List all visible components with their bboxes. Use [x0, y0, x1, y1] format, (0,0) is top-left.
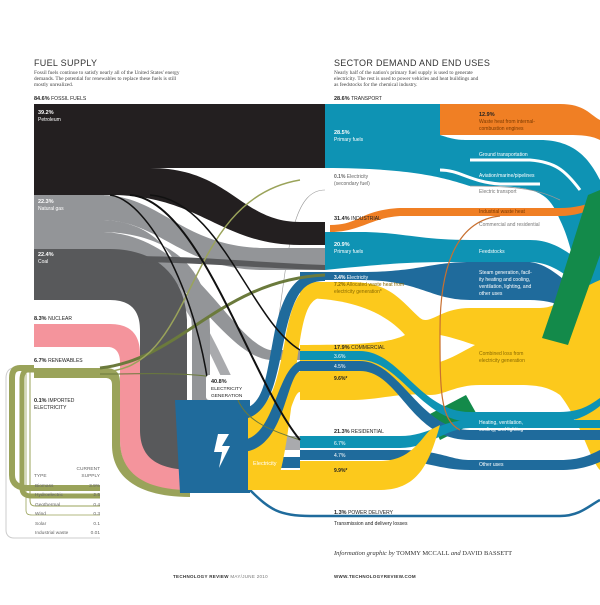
- table: renewables: 2.5: [93, 492, 100, 498]
- labels: right: Aviation/marine/pipelines: [479, 173, 535, 179]
- labels: right: 4.7%: [334, 453, 346, 459]
- industrial steam dark blue: [300, 262, 600, 325]
- icon: lightning: [214, 434, 230, 468]
- label: electricity generation: GENERATION: [211, 393, 243, 399]
- heading: sector demand: [334, 58, 490, 88]
- nuclear: [34, 324, 195, 490]
- labels: right: Transmission and delivery losses: [334, 521, 408, 527]
- labels: right: 3.4% Electricity: [334, 275, 369, 281]
- labels: left: Natural gas: [38, 206, 64, 212]
- labels: right: electricity generation*: [334, 289, 382, 295]
- table: renewables: 0.4: [93, 502, 100, 508]
- orange waste heat transport: [440, 104, 600, 140]
- heading: fuel supply: [34, 58, 180, 88]
- labels: right: Primary fuels: [334, 249, 364, 255]
- table: renewables: [34, 466, 101, 536]
- label: electricity generation: [206, 375, 246, 400]
- labels: left: Petroleum: [38, 117, 61, 123]
- labels: right: Feedstocks: [479, 249, 505, 255]
- transport primary fuels teal: [325, 104, 600, 330]
- labels: left: 39.2%: [38, 110, 54, 116]
- thin lines: [260, 190, 325, 420]
- labels: right: Waste heat from internal-: [479, 119, 535, 125]
- table: renewables: CURRENT: [77, 466, 100, 472]
- labels: right: Steam generation, facil-: [479, 270, 532, 276]
- coal: [34, 249, 210, 480]
- table: renewables: 0.01: [91, 530, 100, 536]
- yellow allocated losses: [248, 283, 325, 490]
- labels: right: 20.9%: [334, 242, 350, 248]
- labels: right: Primary fuels: [334, 137, 364, 143]
- petroleum: [34, 104, 325, 195]
- labels: left: 22.4%: [38, 252, 54, 258]
- table: renewables: 0.3: [93, 511, 100, 517]
- labels: right: ventilation, lighting, and: [479, 284, 531, 290]
- footer: WWW.TECHNOLOGYREVIEW.COM: [334, 574, 416, 579]
- heading: sector demand: SECTOR DEMAND AND END USES: [334, 58, 490, 68]
- labels: right: 6.7%: [334, 441, 346, 447]
- natural gas: [34, 195, 104, 249]
- labels: left: 84.6% FOSSIL FUELS: [34, 96, 87, 102]
- green diagonal: [542, 190, 600, 345]
- labels: right: 9.6%*: [334, 376, 347, 382]
- labels: right: Heating, ventilation,: [479, 420, 523, 426]
- blue bands from generation: [235, 272, 325, 420]
- yellow combined losses: [300, 280, 600, 470]
- table: renewables: SUPPLY: [81, 473, 101, 479]
- labels: right: Other uses: [479, 462, 504, 468]
- footer: [173, 574, 416, 579]
- heading: fuel supply: FUEL SUPPLY: [34, 58, 97, 68]
- labels: right: 31.4% INDUSTRIAL: [334, 216, 381, 222]
- labels: right: Commercial and residential: [479, 222, 540, 228]
- heading: sector demand: as feedstocks for the chemical industry.: [334, 81, 418, 88]
- table: renewables: Industrial waste: [35, 530, 69, 536]
- labels: left: 22.3%: [38, 199, 54, 205]
- labels: right: 4.5%: [334, 364, 346, 370]
- electricity generation blue: [175, 400, 250, 493]
- heading: fuel supply: demands. The potential for renewables to replace these fuels is still: [34, 75, 177, 82]
- industrial waste heat orange: [330, 200, 600, 232]
- labels: left: 0.1% IMPORTED: [34, 398, 75, 404]
- green renewables to industry: [100, 275, 325, 368]
- table: renewables: Wind: [35, 511, 46, 517]
- labels: right: Industrial waste heat: [479, 209, 525, 215]
- labels: right: 1.3% POWER DELIVERY: [334, 510, 394, 516]
- flows: right side end uses: [250, 104, 600, 516]
- labels: right: 7.2% Allocated waste heat from: [334, 282, 404, 288]
- labels: right: 28.5%: [334, 130, 350, 136]
- residential bands: [300, 420, 600, 448]
- labels: right: 9.9%*: [334, 468, 347, 474]
- heading: sector demand: electricity. The rest is used to power vehicles and heat buildings and: [334, 76, 479, 82]
- labels: right: cooling, and lighting: [479, 427, 523, 433]
- labels: right: 12.9%: [479, 112, 495, 118]
- labels: right: (secondary fuel): [334, 181, 370, 187]
- labels: right: 0.1% Electricity: [334, 174, 369, 180]
- label: electricity generation: ELECTRICITY: [211, 386, 243, 392]
- labels: right: electricity generation: [479, 358, 525, 364]
- labels: right: 21.3% RESIDENTIAL: [334, 429, 384, 435]
- table: renewables: 0.1: [93, 521, 100, 527]
- labels: left: [34, 96, 87, 411]
- labels: right: 3.6%: [334, 354, 346, 360]
- labels: right: 17.9% COMMERCIAL: [334, 345, 385, 351]
- heading: fuel supply: Fossil fuels continue to satisfy nearly all of the United States' energy: [34, 69, 180, 76]
- table: renewables: TYPE: [34, 473, 47, 479]
- labels: left: Coal: [38, 259, 48, 265]
- labels: right: other uses: [479, 291, 503, 297]
- table: renewables: Geothermal: [35, 502, 60, 508]
- table: renewables: 3.9%: [89, 483, 101, 489]
- label: electricity generation: 40.8%: [211, 379, 227, 385]
- renewables: [34, 368, 190, 497]
- labels: left: 8.3% NUCLEAR: [34, 316, 72, 322]
- footer: TECHNOLOGY REVIEW MAY/JUNE 2010: [173, 574, 268, 579]
- credit: Information graphic by TOMMY MCCALL and DAVID BASSETT: [333, 550, 512, 557]
- labels: left: ELECTRICITY: [34, 405, 67, 411]
- labels: right: combustion engines: [479, 126, 524, 132]
- labels: right: 28.6% TRANSPORT: [334, 96, 382, 102]
- black thin lines: [110, 195, 210, 400]
- flows: fuel supply: [6, 104, 325, 538]
- heading: fuel supply: mostly unrealized.: [34, 82, 73, 88]
- table: renewables: Solar: [35, 521, 47, 527]
- labels: right: Combined loss from: [479, 351, 523, 357]
- table: renewables: Hydroelectric: [35, 492, 64, 498]
- labels: right: Electric transport: [479, 189, 517, 195]
- table: renewables: Biomass: [35, 483, 54, 489]
- labels: right: [334, 96, 540, 527]
- labels: right: Ground transportation: [479, 152, 528, 158]
- labels: right: ity heating and cooling,: [479, 277, 530, 283]
- industrial primary fuels teal: [325, 232, 600, 300]
- commercial bands: [300, 351, 600, 422]
- label: electricity band: Electricity: [253, 461, 277, 467]
- heading: sector demand: Nearly half of the nation's primary fuel supply is used to generate: [334, 69, 473, 76]
- power delivery line: [250, 490, 600, 516]
- labels: left: 6.7% RENEWABLES: [34, 358, 83, 364]
